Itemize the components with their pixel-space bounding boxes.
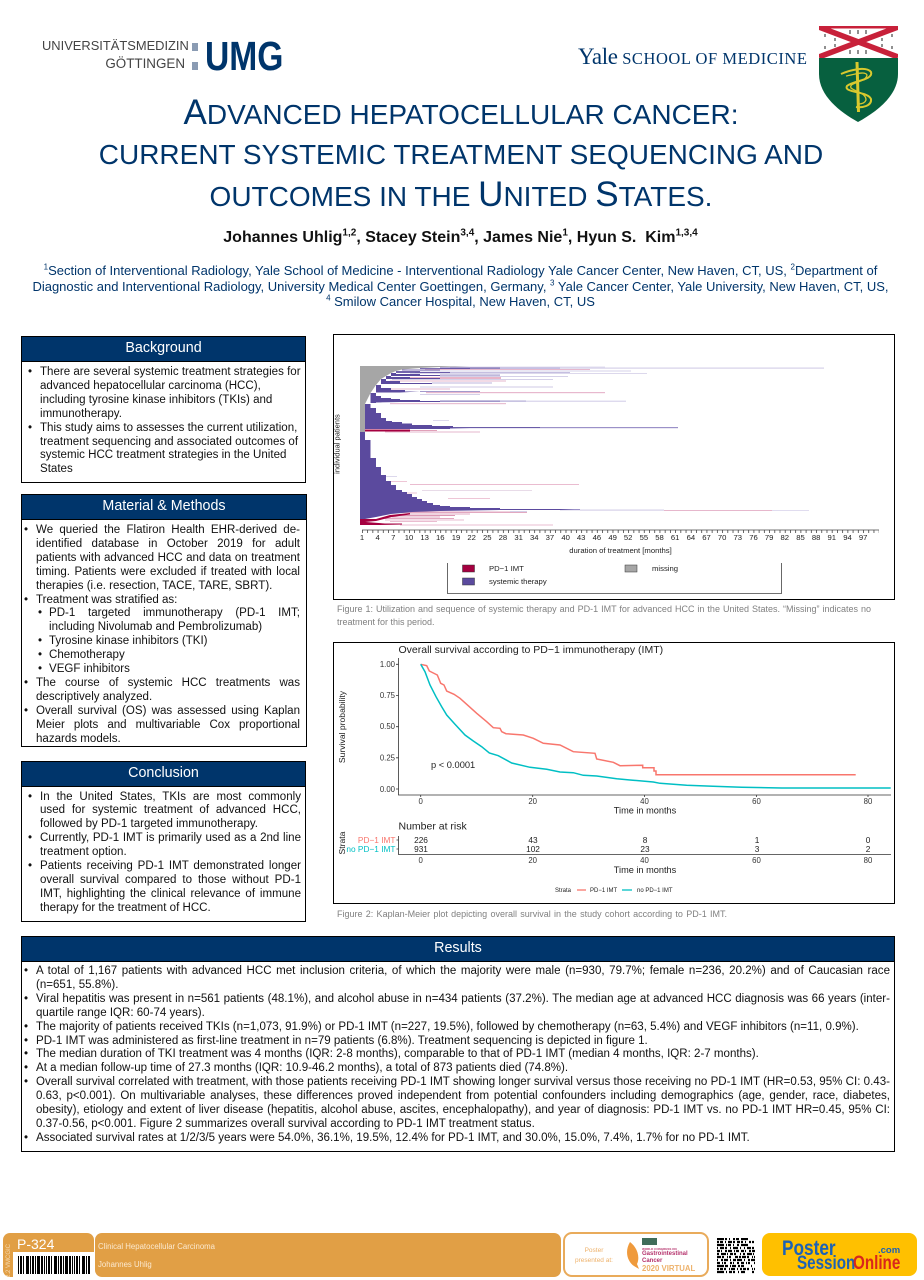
heading: results: Results <box>434 940 482 956</box>
footer: congress badge: presented at: <box>575 1256 613 1264</box>
text: conclusion bullets: IMT, highlighting the clinical relevance of immune <box>40 888 301 900</box>
number at risk table: 2 <box>866 844 871 854</box>
panel: background <box>21 336 306 483</box>
text: background bullets: There are several systemic treatment strategies for <box>40 366 301 378</box>
title: ADVANCED HEPATOCELLULAR CANCER: <box>184 93 738 132</box>
footer: PosterSessionOnline logo <box>762 1233 917 1276</box>
text: background bullets: This study aims to assesses the current utilization, <box>40 422 297 434</box>
footer: poster id tab: 2.2 VMCGIC <box>6 1244 12 1277</box>
x axis: duration ticks and labels: 34 <box>530 533 539 542</box>
text: methods bullets: Chemotherapy <box>49 649 125 661</box>
number at risk table: no PD−1 IMT <box>346 844 396 854</box>
text: results bullets: 0.63, p<0.001). On multivariable analyses, these differences proved independent from potential confounders including demographics (age, gender, race, diabetes, <box>36 1090 890 1102</box>
text: results bullets: At a median follow-up time of 27.3 months (IQR: 10.9-46.2 months), a total of 873 patients died (74.8%). <box>36 1062 568 1074</box>
number at risk table: 3 <box>755 844 760 854</box>
x axis: duration ticks and labels: 43 <box>577 533 585 542</box>
number at risk table: 0 <box>419 856 424 865</box>
caption: figure 2: Figure 2: Kaplan-Meier plot depicting overall survival in the study cohort according to PD-1 IMT. <box>337 909 727 919</box>
x axis: duration ticks and labels: 40 <box>561 533 570 542</box>
text: results bullets: Associated survival rates at 1/2/3/5 years were 54.0%, 36.1%, 19.5%, 12.4% for PD-1 IMT, and 30.0%, 15.0%, 7.4%, 1.7% for no PD-1 IMT. <box>36 1132 750 1144</box>
title: OUTCOMES IN THE UNITED STATES. <box>210 175 712 214</box>
heading: conclusion <box>22 762 305 787</box>
number at risk table: 43 <box>528 835 538 845</box>
footer: congress badge <box>563 1232 709 1277</box>
chart: long-tail stripes <box>365 366 824 526</box>
text: methods bullets: We queried the Flatiron Health EHR-derived de- <box>36 524 300 536</box>
footer: congress badge: Poster <box>585 1247 603 1254</box>
x axis: duration ticks and labels: 79 <box>765 533 773 542</box>
footer: congress badge: WORLD CONGRESS ON <box>642 1247 677 1251</box>
chart: PD-1 IMT red bands <box>360 513 410 525</box>
number at risk table: 40 <box>640 856 649 865</box>
x axis: duration ticks and labels: 97 <box>859 533 867 542</box>
x axis: 40 <box>640 797 649 806</box>
number at risk table: 226 <box>414 835 428 845</box>
x axis: duration ticks and labels <box>360 530 879 555</box>
caption: figure 1 <box>337 604 871 627</box>
heading: results <box>22 937 894 962</box>
x axis: Time in months <box>614 806 677 816</box>
text: conclusion bullets: Patients receiving PD-1 IMT demonstrated longer <box>40 860 301 872</box>
text: results bullets: Overall survival correlated with treatment, with those patients receiving PD-1 IMT showing longer survival versus those receiving no PD-1 IMT (HR=0.53, 95% CI: 0.43- <box>36 1076 890 1088</box>
chart: main purple staircase <box>360 432 574 519</box>
text: results bullets: PD-1 IMT was administered as first-line treatment in n=79 patients (6.8%). Treatment sequencing is depicted in figure 1. <box>36 1035 648 1047</box>
x axis: duration ticks and labels: 64 <box>687 533 696 542</box>
x axis: duration ticks and labels: duration of treatment [months] <box>569 546 672 555</box>
x axis: duration ticks and labels: 25 <box>483 533 492 542</box>
x axis: duration ticks and labels: 67 <box>702 533 711 542</box>
text: background bullets: advanced hepatocellular carcinoma (HCC), <box>40 380 261 392</box>
number at risk table: Number at risk <box>398 820 468 832</box>
logo: UMG Göttingen: UMG <box>205 33 283 79</box>
x axis: duration ticks and labels: 76 <box>749 533 758 542</box>
p-value: p < 0.0001 <box>431 760 475 770</box>
footer: PosterSessionOnline logo: Online <box>853 1253 900 1274</box>
number at risk table: 60 <box>752 856 761 865</box>
legend: missing <box>652 564 678 573</box>
text: background bullets: treatment sequencing and associated outcomes of <box>40 436 298 448</box>
footer: poster id tab <box>3 1233 94 1277</box>
panel: material and methods <box>21 494 307 747</box>
number at risk table: Time in months <box>614 865 677 875</box>
number at risk table: 931 <box>414 844 428 854</box>
x axis: duration ticks and labels: 55 <box>640 533 648 542</box>
text: conclusion bullets: therapy for the treatment of HCC. <box>40 902 211 914</box>
panel: results <box>21 936 895 1152</box>
x axis: duration ticks and labels: 88 <box>812 533 820 542</box>
x axis: 80 <box>864 797 873 806</box>
chart: missing area <box>360 366 470 432</box>
x axis: duration ticks and labels: 49 <box>608 533 617 542</box>
footer: congress badge: 2020 VIRTUAL <box>642 1264 695 1273</box>
text: methods bullets: identified database in October 2019 for adult <box>36 538 300 550</box>
number at risk table: 0 <box>866 835 871 845</box>
number at risk table: 20 <box>528 856 538 865</box>
text: background bullets: systemic HCC treatment strategies in the United <box>40 449 286 461</box>
text: methods bullets: timing. Patients were excluded if treated with local <box>36 566 300 578</box>
footer: poster id tab: P-324 <box>17 1236 54 1252</box>
x axis: duration ticks and labels: 37 <box>546 533 554 542</box>
curve: no PD-1 IMT <box>421 664 891 788</box>
chart: stacked bars <box>360 366 824 526</box>
logo: UMG Göttingen <box>42 33 283 79</box>
legend: systemic therapy <box>489 577 547 586</box>
footer: PosterSessionOnline logo: Session <box>797 1253 855 1274</box>
text: results bullets: The majority of patients received TKIs (n=1,073, 91.9%) or PD-1 IMT (n=227, 19.5%), followed by chemotherapy (n=63, 5.4%) and VEGF inhibitors (n=11, 0.9%). <box>36 1021 859 1033</box>
x axis: duration ticks and labels: 58 <box>655 533 664 542</box>
x axis <box>419 797 873 816</box>
text: conclusion bullets: used for systemic treatment of advanced HCC, <box>40 804 301 816</box>
x axis: duration ticks and labels: 1 <box>360 533 364 542</box>
footer: category and author bar <box>95 1233 561 1277</box>
chart: tapered purple wedges under the missing area <box>365 368 540 429</box>
text: results bullets: (n=651, 55.8%). <box>36 979 118 991</box>
y axis: 0.25 <box>380 754 396 762</box>
text: methods bullets: Tyrosine kinase inhibitors (TKI) <box>49 635 208 647</box>
text: results bullets: 0.37-0.56, p<0.001. Figure 2 summarizes overall survival according to PD-1 IMT treatment status. <box>36 1118 535 1130</box>
affiliations: 4 Smilow Cancer Hospital, New Haven, CT, US <box>326 294 595 309</box>
authors: Johannes Uhlig1,2, Stacey Stein3,4, James Nie1, Hyun S. Kim1,3,4 <box>223 228 698 246</box>
text: conclusion bullets: Currently, PD-1 IMT is primarily used as a 2nd line <box>40 832 301 844</box>
affiliations <box>32 263 889 309</box>
heading: background: Background <box>125 340 202 356</box>
title: CURRENT SYSTEMIC TREATMENT SEQUENCING AND <box>99 139 823 170</box>
number at risk table: Strata <box>337 831 347 854</box>
legend: no PD−1 IMT <box>637 888 673 894</box>
x axis: duration ticks and labels: 28 <box>499 533 507 542</box>
panel: figure 1 treatment sequence chart <box>333 334 895 600</box>
panel: figure 2 Kaplan-Meier plot: Survival probability <box>337 690 347 763</box>
x axis: duration ticks and labels: 46 <box>593 533 601 542</box>
text: results bullets: Viral hepatitis was present in n=561 patients (48.1%), and alcohol abuse in n=434 patients (37.2%). The median age at advanced HCC diagnosis was 66 years (inter- <box>36 993 890 1005</box>
x axis: duration ticks and labels: 70 <box>718 533 726 542</box>
x axis: duration ticks and labels: 16 <box>436 533 445 542</box>
title <box>99 93 823 214</box>
y axis: 0.00 <box>380 785 396 794</box>
text: methods bullets: Treatment was stratified as: <box>36 594 177 606</box>
text: methods bullets: including Nivolumab and Pembrolizumab) <box>49 621 262 633</box>
legend: PD−1 IMT <box>489 564 524 573</box>
x axis: duration ticks and labels: 7 <box>391 533 395 542</box>
heading: material and methods: Material & Methods <box>102 498 226 514</box>
x axis: duration ticks and labels: 10 <box>405 533 413 542</box>
panel: figure 2 Kaplan-Meier plot <box>333 642 895 904</box>
affiliations: 1Section of Interventional Radiology, Yale School of Medicine - Interventional Radiology Yale Cancer Center, New Haven, CT, US, 2Department of <box>44 263 877 278</box>
panel: conclusion <box>21 761 306 922</box>
x axis: 20 <box>528 797 538 806</box>
text: methods bullets: The course of systemic HCC treatments was <box>36 677 300 689</box>
x axis: duration ticks and labels: 22 <box>467 533 476 542</box>
x axis: duration ticks and labels: 52 <box>624 533 632 542</box>
text: background bullets: States <box>40 463 73 475</box>
icon: Yale medicine shield <box>819 26 898 122</box>
x axis: duration ticks and labels: 73 <box>734 533 742 542</box>
text: background bullets: immunotherapy. <box>40 408 122 420</box>
affiliations: Diagnostic and Interventional Radiology, University Medical Center Goettingen, Germany, 3 Yale Cancer Center, Yale University, New Haven, CT, US, <box>32 278 889 294</box>
caption: figure 1: Figure 1: Utilization and sequence of systemic therapy and PD-1 IMT for advanced HCC in the United States. “Missing” indicates no <box>337 604 871 614</box>
number at risk table: 1 <box>755 835 760 845</box>
heading: material and methods <box>22 495 306 520</box>
logo: UMG Göttingen: UNIVERSITÄTSMEDIZIN <box>42 38 189 53</box>
footer: PosterSessionOnline logo: Poster <box>782 1237 836 1260</box>
text: results bullets: A total of 1,167 patients with advanced HCC met inclusion criteria, of which the majority were male (n=930, 79.7%; female n=236, 20.2%) and of Caucasian race <box>36 965 890 977</box>
text: methods bullets: descriptively analyzed. <box>36 691 152 703</box>
heading: background <box>22 337 305 362</box>
number at risk table: 23 <box>640 844 650 854</box>
y axis: 0.50 <box>380 722 396 731</box>
text: results bullets <box>24 965 890 1144</box>
number at risk table <box>337 820 891 875</box>
legend: Strata <box>555 888 572 894</box>
number at risk table: 80 <box>864 856 873 865</box>
curve: PD-1 IMT <box>421 664 856 775</box>
barcode <box>18 1256 90 1274</box>
footer: QR code <box>717 1238 755 1274</box>
text: conclusion bullets: In the United States, TKIs are most commonly <box>40 790 301 802</box>
text: methods bullets: VEGF inhibitors <box>49 663 130 675</box>
x axis: duration ticks and labels: 91 <box>828 533 836 542</box>
text: conclusion bullets: followed by PD-1 targeted immunotherapy. <box>40 818 258 830</box>
x axis: duration ticks and labels: 61 <box>671 533 679 542</box>
heading: conclusion: Conclusion <box>128 765 199 781</box>
x axis: duration ticks and labels: 31 <box>514 533 523 542</box>
number at risk table: PD−1 IMT <box>358 835 396 845</box>
footer: category and author bar: Clinical Hepatocellular Carcinoma <box>98 1242 215 1251</box>
y axis <box>380 658 891 797</box>
footer: congress badge: Cancer <box>642 1258 662 1264</box>
text: methods bullets <box>24 524 300 745</box>
y axis: 1.00 <box>380 660 396 669</box>
text: methods bullets: Meier plots and multivariable Cox proportional <box>36 719 300 731</box>
legend <box>555 888 673 894</box>
x axis: 0 <box>419 797 424 806</box>
footer: category and author bar: Johannes Uhlig <box>98 1260 152 1269</box>
text: methods bullets: hazards models. <box>36 733 121 745</box>
legend: PD−1 IMT <box>590 888 618 894</box>
text: conclusion bullets <box>28 790 301 914</box>
footer: PosterSessionOnline logo: .com <box>878 1245 900 1256</box>
footer: congress badge: Gastrointestinal <box>642 1251 688 1257</box>
legend <box>448 563 782 594</box>
x axis: duration ticks and labels: 4 <box>376 533 381 542</box>
x axis: duration ticks and labels: 19 <box>452 533 460 542</box>
number at risk table: 8 <box>643 835 648 845</box>
text: results bullets: The median duration of TKI treatment was 4 months (IQR: 2-8 months), comparable to that of PD-1 IMT (median 4 months, IQR: 2-7 months). <box>36 1048 759 1060</box>
number at risk table: 102 <box>526 844 540 854</box>
text: methods bullets: therapies (i.e. resection, TACE, TARE, SBRT). <box>36 580 272 592</box>
caption: figure 1: treatment for this period. <box>337 616 435 626</box>
icon: wheat <box>627 1242 639 1269</box>
x axis: 60 <box>752 797 761 806</box>
text: methods bullets: PD-1 targeted immunotherapy (PD-1 IMT; <box>49 607 300 619</box>
text: results bullets: obesity), etiology and extent of liver disease (hepatitis, alcohol abuse, ascites, encephalopathy), and year of diagnosis: PD-1 IMT vs. no PD-1 IMT HR=0.45, 95% CI: <box>36 1104 890 1116</box>
chart title: Overall survival according to PD−1 immunotherapy (IMT) <box>398 644 663 656</box>
text: conclusion bullets: overall survival compared to those without PD-1 <box>40 874 301 886</box>
text: methods bullets: Overall survival (OS) was assessed using Kaplan <box>36 705 300 717</box>
x axis: duration ticks and labels: 94 <box>843 533 852 542</box>
text: background bullets <box>28 366 301 475</box>
x axis: duration ticks and labels: 85 <box>796 533 805 542</box>
y axis: 0.75 <box>380 691 396 700</box>
x axis: duration ticks and labels: 13 <box>420 533 429 542</box>
x axis: duration ticks and labels: 82 <box>781 533 789 542</box>
text: methods bullets: patients with advanced HCC and data on treatment <box>36 552 300 564</box>
text: results bullets: quartile range IQR: 60-74 years). <box>36 1007 205 1019</box>
logo: UMG Göttingen: GÖTTINGEN <box>105 56 185 71</box>
text: conclusion bullets: treatment option. <box>40 846 127 858</box>
text: background bullets: including tyrosine kinase inhibitors (TKIs) and <box>40 394 272 406</box>
logo: Yale School of Medicine: Yale SCHOOL OF MEDICINE <box>578 44 807 69</box>
